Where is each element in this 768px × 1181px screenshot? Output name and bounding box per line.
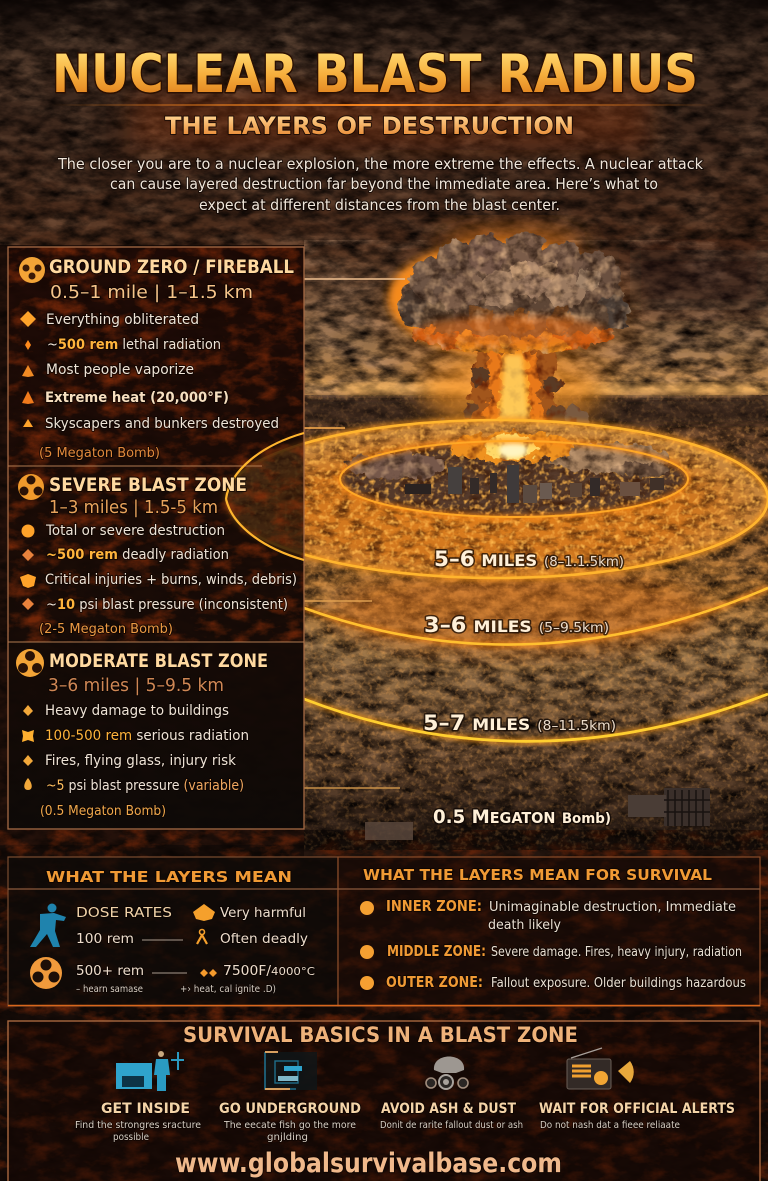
ring 1 bbox=[340, 441, 688, 517]
item: get inside bbox=[75, 1051, 201, 1143]
bullet: fires: Fires, flying glass, injury risk bbox=[45, 753, 237, 769]
range: 3–6 miles | 5–9.5 km bbox=[48, 675, 224, 696]
icon: radio bbox=[567, 1048, 634, 1089]
bullet: heavy damage: Heavy damage to buildings bbox=[45, 703, 229, 719]
label: 5-6 miles: 5–6 MILES (8–1.1.5km) bbox=[434, 547, 624, 571]
bullet: blast pressure: ~10 psi blast pressure (inconsistent) bbox=[46, 597, 288, 613]
bomb size: (2-5 Megaton Bomb) bbox=[39, 622, 173, 637]
dose rates heading: DOSE RATES bbox=[76, 906, 172, 921]
item: go underground: The eecate fish go the more bbox=[223, 1120, 356, 1131]
website url: www.globalsurvivalbase.com bbox=[175, 1148, 562, 1179]
zone: ground zero bbox=[19, 256, 294, 461]
row: temperature: 7500F/ 4000°C bbox=[223, 964, 315, 979]
range: 0.5–1 mile | 1–1.5 km bbox=[50, 282, 253, 303]
heading: WHAT THE LAYERS MEAN bbox=[46, 868, 292, 886]
row: 500+ rem bbox=[76, 964, 187, 979]
range: 1–3 miles | 1.5-5 km bbox=[49, 497, 218, 518]
heading: MODERATE BLAST ZONE bbox=[49, 650, 268, 672]
bullet: vaporize: Most people vaporize bbox=[46, 362, 194, 378]
title: NUCLEAR BLAST RADIUS bbox=[52, 44, 698, 105]
item: wait for official alerts bbox=[539, 1048, 735, 1131]
panel: what the layers mean bbox=[8, 857, 338, 1006]
bullet: critical injuries: Critical injuries + burns, winds, debris) bbox=[45, 572, 297, 588]
illustration: blast rings on ground bbox=[226, 420, 768, 840]
icon: very harmful: Very harmful bbox=[220, 906, 306, 921]
outer disc bbox=[226, 420, 768, 578]
middle zone bbox=[360, 942, 742, 960]
subtitle: THE LAYERS OF DESTRUCTION bbox=[165, 112, 574, 140]
icon: bunker bbox=[265, 1051, 317, 1090]
icon: running person bbox=[30, 904, 66, 947]
item: get inside: GET INSIDE bbox=[101, 1101, 190, 1117]
city buildings bbox=[405, 465, 664, 503]
ring 4 bbox=[304, 694, 768, 741]
bullet: extreme heat: Extreme heat (20,000°F) bbox=[45, 390, 229, 406]
bullet: skyscrapers: Skyscapers and bunkers destroyed bbox=[45, 416, 279, 432]
heading: SURVIVAL BASICS IN A BLAST ZONE bbox=[183, 1023, 578, 1047]
bullet: deadly radiation: ~500 rem deadly radiation bbox=[46, 547, 229, 563]
label: 3-6 miles: 3–6 MILES (5–9.5km) bbox=[424, 613, 609, 637]
bomb size: (5 Megaton Bomb) bbox=[39, 446, 160, 461]
heading: GROUND ZERO / FIREBALL bbox=[49, 256, 294, 278]
intro paragraph: expect at different distances from the blast center. bbox=[199, 196, 560, 214]
item: go underground: gnjlding bbox=[267, 1132, 308, 1143]
icon: shelter and person bbox=[116, 1051, 184, 1091]
stem bbox=[421, 345, 606, 470]
item: wait for official alerts: WAIT FOR OFFICIAL ALERTS bbox=[539, 1101, 735, 1117]
icon: often deadly bbox=[197, 930, 308, 947]
item: wait for official alerts: Do not nash dat a fieee reliaate bbox=[540, 1120, 680, 1131]
ring 2 bbox=[226, 420, 768, 578]
ring labels bbox=[423, 547, 624, 828]
icon: gas mask bbox=[426, 1056, 468, 1089]
cap bbox=[399, 232, 629, 353]
footnotes: +› heat, cal ignite .D) bbox=[180, 984, 276, 995]
bullet: psi: ~5 psi blast pressure (variable) bbox=[46, 778, 244, 794]
panel: survival basics bbox=[8, 1021, 760, 1181]
heading: WHAT THE LAYERS MEAN FOR SURVIVAL bbox=[363, 866, 712, 884]
item: avoid ash and dust: Donit de rarite fallout dust or ash bbox=[380, 1120, 523, 1131]
outer zone: Fallout exposure. Older buildings hazardous bbox=[491, 976, 746, 991]
panel: what the layers mean for survival bbox=[8, 857, 760, 1006]
ring overlap on panel bbox=[226, 433, 304, 560]
item: avoid ash and dust: AVOID ASH & DUST bbox=[381, 1101, 516, 1117]
middle zone: MIDDLE ZONE: bbox=[387, 942, 486, 960]
icon: radiation face bbox=[19, 257, 45, 283]
ring 3 bbox=[304, 588, 768, 645]
item: go underground: GO UNDERGROUND bbox=[219, 1101, 361, 1117]
inner zone: Unimaginable destruction, Immediate bbox=[489, 900, 736, 915]
intro paragraph: The closer you are to a nuclear explosion, the more extreme the effects. A nuclear attack bbox=[57, 155, 703, 173]
bullet: total destruction: Total or severe destruction bbox=[45, 523, 225, 539]
row: 500+ rem: 500+ rem bbox=[76, 964, 144, 979]
zone: moderate blast bbox=[16, 649, 268, 819]
heading: SEVERE BLAST ZONE bbox=[49, 474, 247, 496]
bullet: everything obliterated: Everything obliterated bbox=[46, 312, 199, 328]
inner zone: INNER ZONE: bbox=[386, 897, 482, 915]
icon: often deadly: Often deadly bbox=[220, 932, 308, 947]
zone: severe blast bbox=[18, 474, 297, 637]
intro paragraph: can cause layered destruction far beyond the immediate area. Here’s what to bbox=[110, 175, 658, 193]
label: 5-7 miles: 5–7 MILES (8–11.5km) bbox=[423, 711, 616, 735]
footnotes bbox=[76, 984, 276, 995]
smoke bbox=[345, 443, 670, 479]
outer zone: OUTER ZONE: bbox=[386, 973, 483, 991]
intro paragraph bbox=[57, 155, 703, 214]
label: 0.5 megaton bomb: 0.5 MEGATON Bomb) bbox=[433, 806, 611, 828]
row: 100 rem: 100 rem bbox=[76, 932, 134, 947]
footnotes: – hearn samase bbox=[76, 984, 143, 995]
bomb size: (0.5 Megaton Bomb) bbox=[40, 804, 166, 819]
inner zone: death likely bbox=[488, 918, 561, 933]
item: avoid ash and dust bbox=[380, 1056, 523, 1131]
panel: blast zones bbox=[7, 246, 305, 830]
item: get inside: possible bbox=[113, 1132, 149, 1143]
icon: radiation bbox=[30, 957, 62, 989]
illustration: mushroom cloud explosion bbox=[362, 230, 662, 470]
bullet: lethal radiation: ~500 rem lethal radiation bbox=[47, 337, 221, 353]
item: go underground bbox=[219, 1051, 361, 1143]
icon: trefoil bbox=[18, 474, 44, 500]
ruined buildings bbox=[365, 788, 710, 840]
row: 100 rem bbox=[76, 932, 183, 947]
icon: trefoil bbox=[16, 649, 44, 677]
connector lines bbox=[304, 279, 405, 788]
icon: very harmful bbox=[193, 904, 306, 921]
inner zone bbox=[360, 897, 736, 933]
item: get inside: Find the strongres sracture bbox=[75, 1120, 201, 1131]
bullet: serious radiation: 100-500 rem serious radiation bbox=[45, 728, 249, 744]
outer zone bbox=[360, 973, 746, 991]
